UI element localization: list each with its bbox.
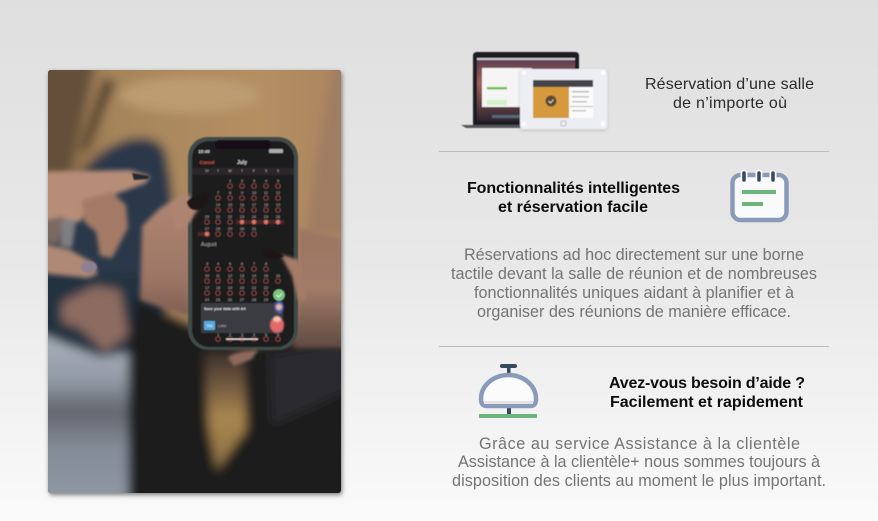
text: booking from anywhere: [645, 76, 814, 112]
tablet: [520, 69, 607, 129]
text: ad hoc reservations: [451, 246, 817, 321]
heading: smart features: et réservation facile: [498, 199, 648, 216]
August calendar numbers: 2: [229, 333, 231, 337]
fingernails: [81, 173, 284, 273]
July calendar numbers: 27: [205, 227, 209, 231]
green check badge: [273, 289, 285, 301]
phone status and calendar header: W: [228, 169, 232, 173]
July calendar numbers: 8: [229, 191, 231, 195]
photo: hands holding a smartphone with calendar app: [46, 68, 346, 498]
July highlighted period bands: [198, 220, 284, 236]
phone status and calendar header: T: [241, 169, 244, 173]
August calendar numbers: 10: [205, 274, 209, 278]
August calendar numbers: 1: [217, 333, 219, 337]
heading: need help: [609, 375, 805, 411]
text: booking from anywhere: de n’importe où: [673, 95, 787, 112]
July calendar numbers: 31: [252, 227, 256, 231]
text: ad hoc reservations: fonctionnalités uniques aidant à planifier et à: [474, 284, 794, 302]
August calendar numbers: 4: [217, 262, 219, 266]
laptop: [461, 52, 579, 128]
home indicator: [226, 338, 258, 340]
August calendar numbers: 8: [265, 262, 267, 266]
phone banner: save your data: Later: [218, 324, 227, 328]
icon: calendar notepad: [732, 173, 786, 220]
August calendar numbers: 12: [228, 274, 232, 278]
heading: smart features: Fonctionnalités intelligentes: [467, 180, 680, 197]
text: customer assistance: disposition des clients au moment le plus important.: [452, 472, 826, 490]
phone status and calendar header: 10:40: [198, 149, 210, 154]
July calendar numbers: 25: [264, 215, 268, 219]
phone status and calendar header: F: [253, 169, 256, 173]
text: customer assistance: [452, 435, 826, 490]
July calendar numbers: 17: [252, 203, 256, 207]
phone banner character illustration: [270, 300, 284, 333]
July calendar numbers: 15: [228, 203, 232, 207]
August calendar numbers: 28: [252, 298, 256, 302]
August calendar numbers: 11: [216, 274, 220, 278]
August calendar numbers: 6: [241, 262, 243, 266]
heading: need help: Avez-vous besoin d’aide ?: [609, 375, 805, 392]
icon: service bell: [479, 364, 537, 418]
July calendar numbers: 24: [252, 215, 256, 219]
heading: need help: Facilement et rapidement: [610, 394, 804, 411]
phone status and calendar header: M: [205, 169, 209, 173]
August calendar numbers: 20: [240, 286, 244, 290]
text: booking from anywhere: Réservation d’une salle: [645, 76, 814, 93]
August calendar numbers: 5: [229, 262, 231, 266]
August calendar numbers: 26: [228, 298, 232, 302]
text: ad hoc reservations: Réservations ad hoc directement sur une borne: [464, 246, 804, 264]
July calendar numbers: 11: [264, 191, 268, 195]
phone status and calendar header: [198, 149, 283, 248]
July calendar numbers: 7: [217, 191, 219, 195]
August calendar numbers: 3: [206, 262, 208, 266]
July calendar numbers: 29: [228, 227, 232, 231]
July calendar numbers: 19: [276, 203, 280, 207]
phone status and calendar header: S: [277, 169, 280, 173]
August calendar numbers: 14: [252, 274, 256, 278]
July calendar numbers: 2: [241, 179, 243, 183]
heading: smart features: [467, 180, 680, 216]
July calendar numbers: 22: [228, 215, 232, 219]
August calendar numbers: 4: [253, 333, 255, 337]
August calendar numbers: 7: [253, 262, 255, 266]
July calendar numbers: 5: [277, 179, 279, 183]
phone status and calendar header: Cancel: [200, 160, 214, 165]
July calendar numbers: 16: [240, 203, 244, 207]
August calendar rings: [205, 267, 280, 341]
July calendar numbers: 1: [229, 179, 231, 183]
text: ad hoc reservations: tactile devant la salle de réunion et de nombreuses: [451, 265, 817, 283]
August calendar numbers: 21: [252, 286, 256, 290]
phone body: [188, 137, 298, 350]
August calendar numbers: 27: [240, 298, 244, 302]
phone status and calendar header: T: [217, 169, 220, 173]
skin over the phone edge: [187, 193, 305, 367]
August calendar numbers: 18: [216, 286, 220, 290]
August calendar numbers: 29: [264, 298, 268, 302]
July calendar numbers: 3: [253, 179, 255, 183]
text: customer assistance: Assistance à la clientèle+ nous sommes toujours à: [458, 453, 820, 471]
July calendar numbers: 26: [276, 215, 280, 219]
text: ad hoc reservations: organiser des réunions de manière efficace.: [477, 303, 791, 321]
August calendar numbers: [205, 262, 280, 337]
July calendar rings: [205, 184, 280, 236]
phone banner: save your data: Save your data with AX: [204, 307, 246, 311]
phone banner: save your data: [201, 303, 283, 333]
July calendar numbers: 18: [264, 203, 268, 207]
July calendar numbers: 10: [252, 191, 256, 195]
August calendar numbers: 6: [277, 333, 279, 337]
August calendar numbers: 5: [265, 333, 267, 337]
icon: laptop and tablet devices: [461, 52, 607, 129]
July calendar numbers: 14: [216, 203, 220, 207]
August calendar numbers: 25: [216, 298, 220, 302]
July calendar numbers: [205, 179, 280, 231]
phone status and calendar header: July: [237, 160, 247, 166]
August calendar numbers: 15: [264, 274, 268, 278]
phone banner: save your data: Yes: [206, 324, 213, 328]
July calendar numbers: 30: [240, 227, 244, 231]
hands: [30, 170, 345, 348]
August calendar numbers: 22: [264, 286, 268, 290]
August calendar numbers: 24: [205, 298, 209, 302]
August calendar numbers: 13: [240, 274, 244, 278]
divider: [439, 346, 829, 347]
July calendar numbers: 4: [265, 179, 267, 183]
July calendar numbers: 12: [276, 191, 280, 195]
phone status and calendar header: S: [265, 169, 268, 173]
text: customer assistance: Grâce au service Assistance à la clientèle: [479, 435, 800, 453]
divider: [439, 151, 829, 152]
July calendar numbers: 23: [240, 215, 244, 219]
July calendar numbers: 20: [205, 215, 209, 219]
phone status and calendar header: August: [201, 242, 217, 248]
July calendar numbers: 28: [216, 227, 220, 231]
July calendar numbers: 21: [216, 215, 220, 219]
August calendar numbers: 3: [241, 333, 243, 337]
August calendar numbers: 17: [205, 286, 209, 290]
July calendar numbers: 9: [241, 191, 243, 195]
August calendar numbers: 16: [276, 274, 280, 278]
August calendar numbers: 19: [228, 286, 232, 290]
